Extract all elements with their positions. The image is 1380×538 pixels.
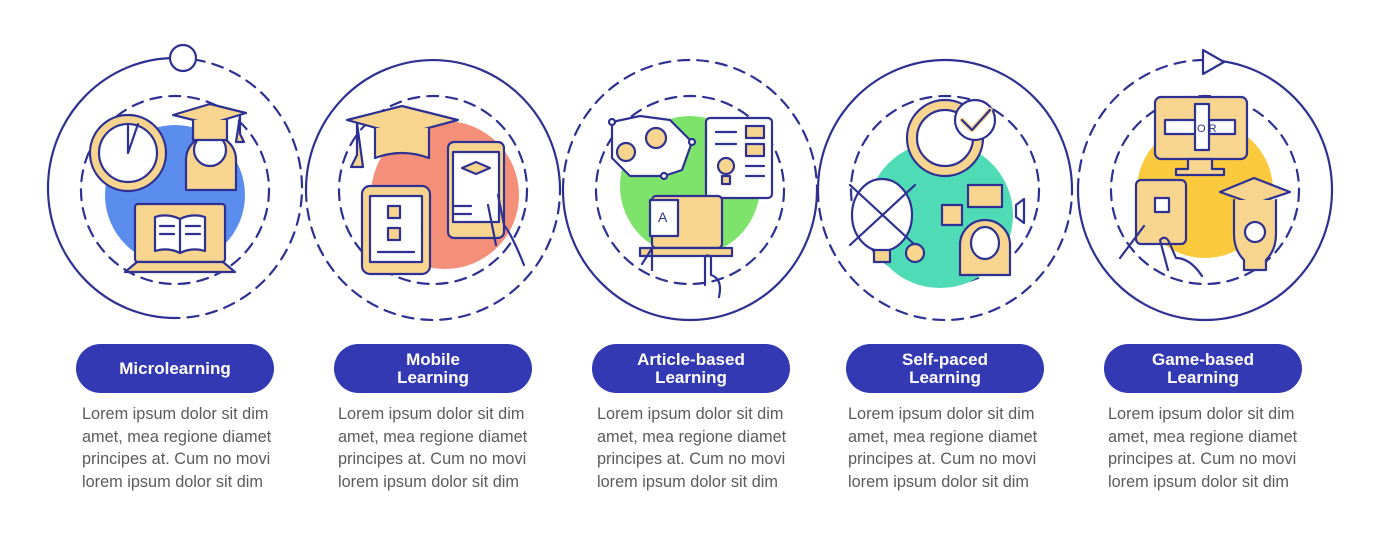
- circle 2: mobile learning: [306, 60, 560, 320]
- text: self-paced: lorem ipsum dolor sit dim: [848, 473, 1029, 491]
- pill: Mobile Learning: Learning: [397, 368, 469, 386]
- text: microlearning: [82, 405, 272, 491]
- text: game: amet, mea regione diamet: [1108, 428, 1297, 446]
- icon: graduation cap: [347, 106, 458, 167]
- circle 4: self-paced learning: [818, 60, 1072, 320]
- circle 5: game-based learning: [1078, 50, 1332, 320]
- icon: document board with bulb: [706, 118, 772, 198]
- pill: Self-paced Learning: Learning: [909, 368, 981, 386]
- pill: Microlearning: [76, 344, 274, 393]
- icon: tablet puzzle with hands: [1120, 180, 1202, 276]
- pill: Article-based Learning: [592, 344, 790, 393]
- text: self-paced: [848, 405, 1038, 491]
- pill: Game-based Learning: [1104, 344, 1302, 393]
- icon: learner with book: [942, 185, 1024, 275]
- text: microlearning: amet, mea regione diamet: [82, 428, 271, 446]
- text: self-paced: principes at. Cum no movi: [848, 450, 1036, 468]
- text: article: [597, 405, 786, 491]
- text: self-paced: amet, mea regione diamet: [848, 428, 1037, 446]
- icon: graduate: [173, 104, 246, 190]
- text: microlearning: Lorem ipsum dolor sit dim: [82, 405, 268, 423]
- text: game: principes at. Cum no movi: [1108, 450, 1296, 468]
- text: article: amet, mea regione diamet: [597, 428, 786, 446]
- text: article: principes at. Cum no movi: [597, 450, 785, 468]
- icon: laptop with article: [640, 196, 732, 297]
- text: mobile: principes at. Cum no movi: [338, 450, 526, 468]
- pill: Mobile Learning: Mobile: [406, 350, 460, 368]
- text: microlearning: principes at. Cum no movi: [82, 450, 270, 468]
- icon: monitor crossword: [1155, 97, 1247, 175]
- text: mobile: [338, 405, 528, 491]
- text: game: [1108, 405, 1298, 491]
- pill: Self-paced Learning: [846, 344, 1044, 393]
- icon: cap bulb: [1220, 178, 1290, 270]
- text: microlearning: lorem ipsum dolor sit dim: [82, 473, 263, 491]
- icon: phone with hand: [448, 142, 524, 265]
- icon: laptop with book: [125, 204, 235, 272]
- text: article: lorem ipsum dolor sit dim: [597, 473, 778, 491]
- icon: brain network with gears: [609, 116, 695, 179]
- icon: brain bulb: [850, 179, 924, 262]
- pill: Game-based Learning: Game-based: [1152, 350, 1254, 368]
- icon: tablet: [362, 186, 430, 274]
- icon: clock with check: [907, 100, 995, 176]
- circle 3: article-based learning: [563, 60, 817, 320]
- icon: monitor crossword: O R: [1197, 123, 1217, 135]
- icon: laptop with article: A: [658, 209, 668, 225]
- pill: Self-paced Learning: Self-paced: [902, 350, 988, 368]
- text: game: Lorem ipsum dolor sit dim: [1108, 405, 1294, 423]
- pill: Article-based Learning: Article-based: [637, 350, 745, 368]
- icon: clock: [90, 115, 166, 191]
- text: mobile: amet, mea regione diamet: [338, 428, 527, 446]
- pill: Article-based Learning: Learning: [655, 368, 727, 386]
- text: game: lorem ipsum dolor sit dim: [1108, 473, 1289, 491]
- text: mobile: lorem ipsum dolor sit dim: [338, 473, 519, 491]
- text: article: Lorem ipsum dolor sit dim: [597, 405, 783, 423]
- circle 1: microlearning: [48, 45, 302, 318]
- text: mobile: Lorem ipsum dolor sit dim: [338, 405, 524, 423]
- pill: Mobile Learning: [334, 344, 532, 393]
- pill: Microlearning: Microlearning: [119, 358, 231, 378]
- text: self-paced: Lorem ipsum dolor sit dim: [848, 405, 1034, 423]
- pill: Game-based Learning: Learning: [1167, 368, 1239, 386]
